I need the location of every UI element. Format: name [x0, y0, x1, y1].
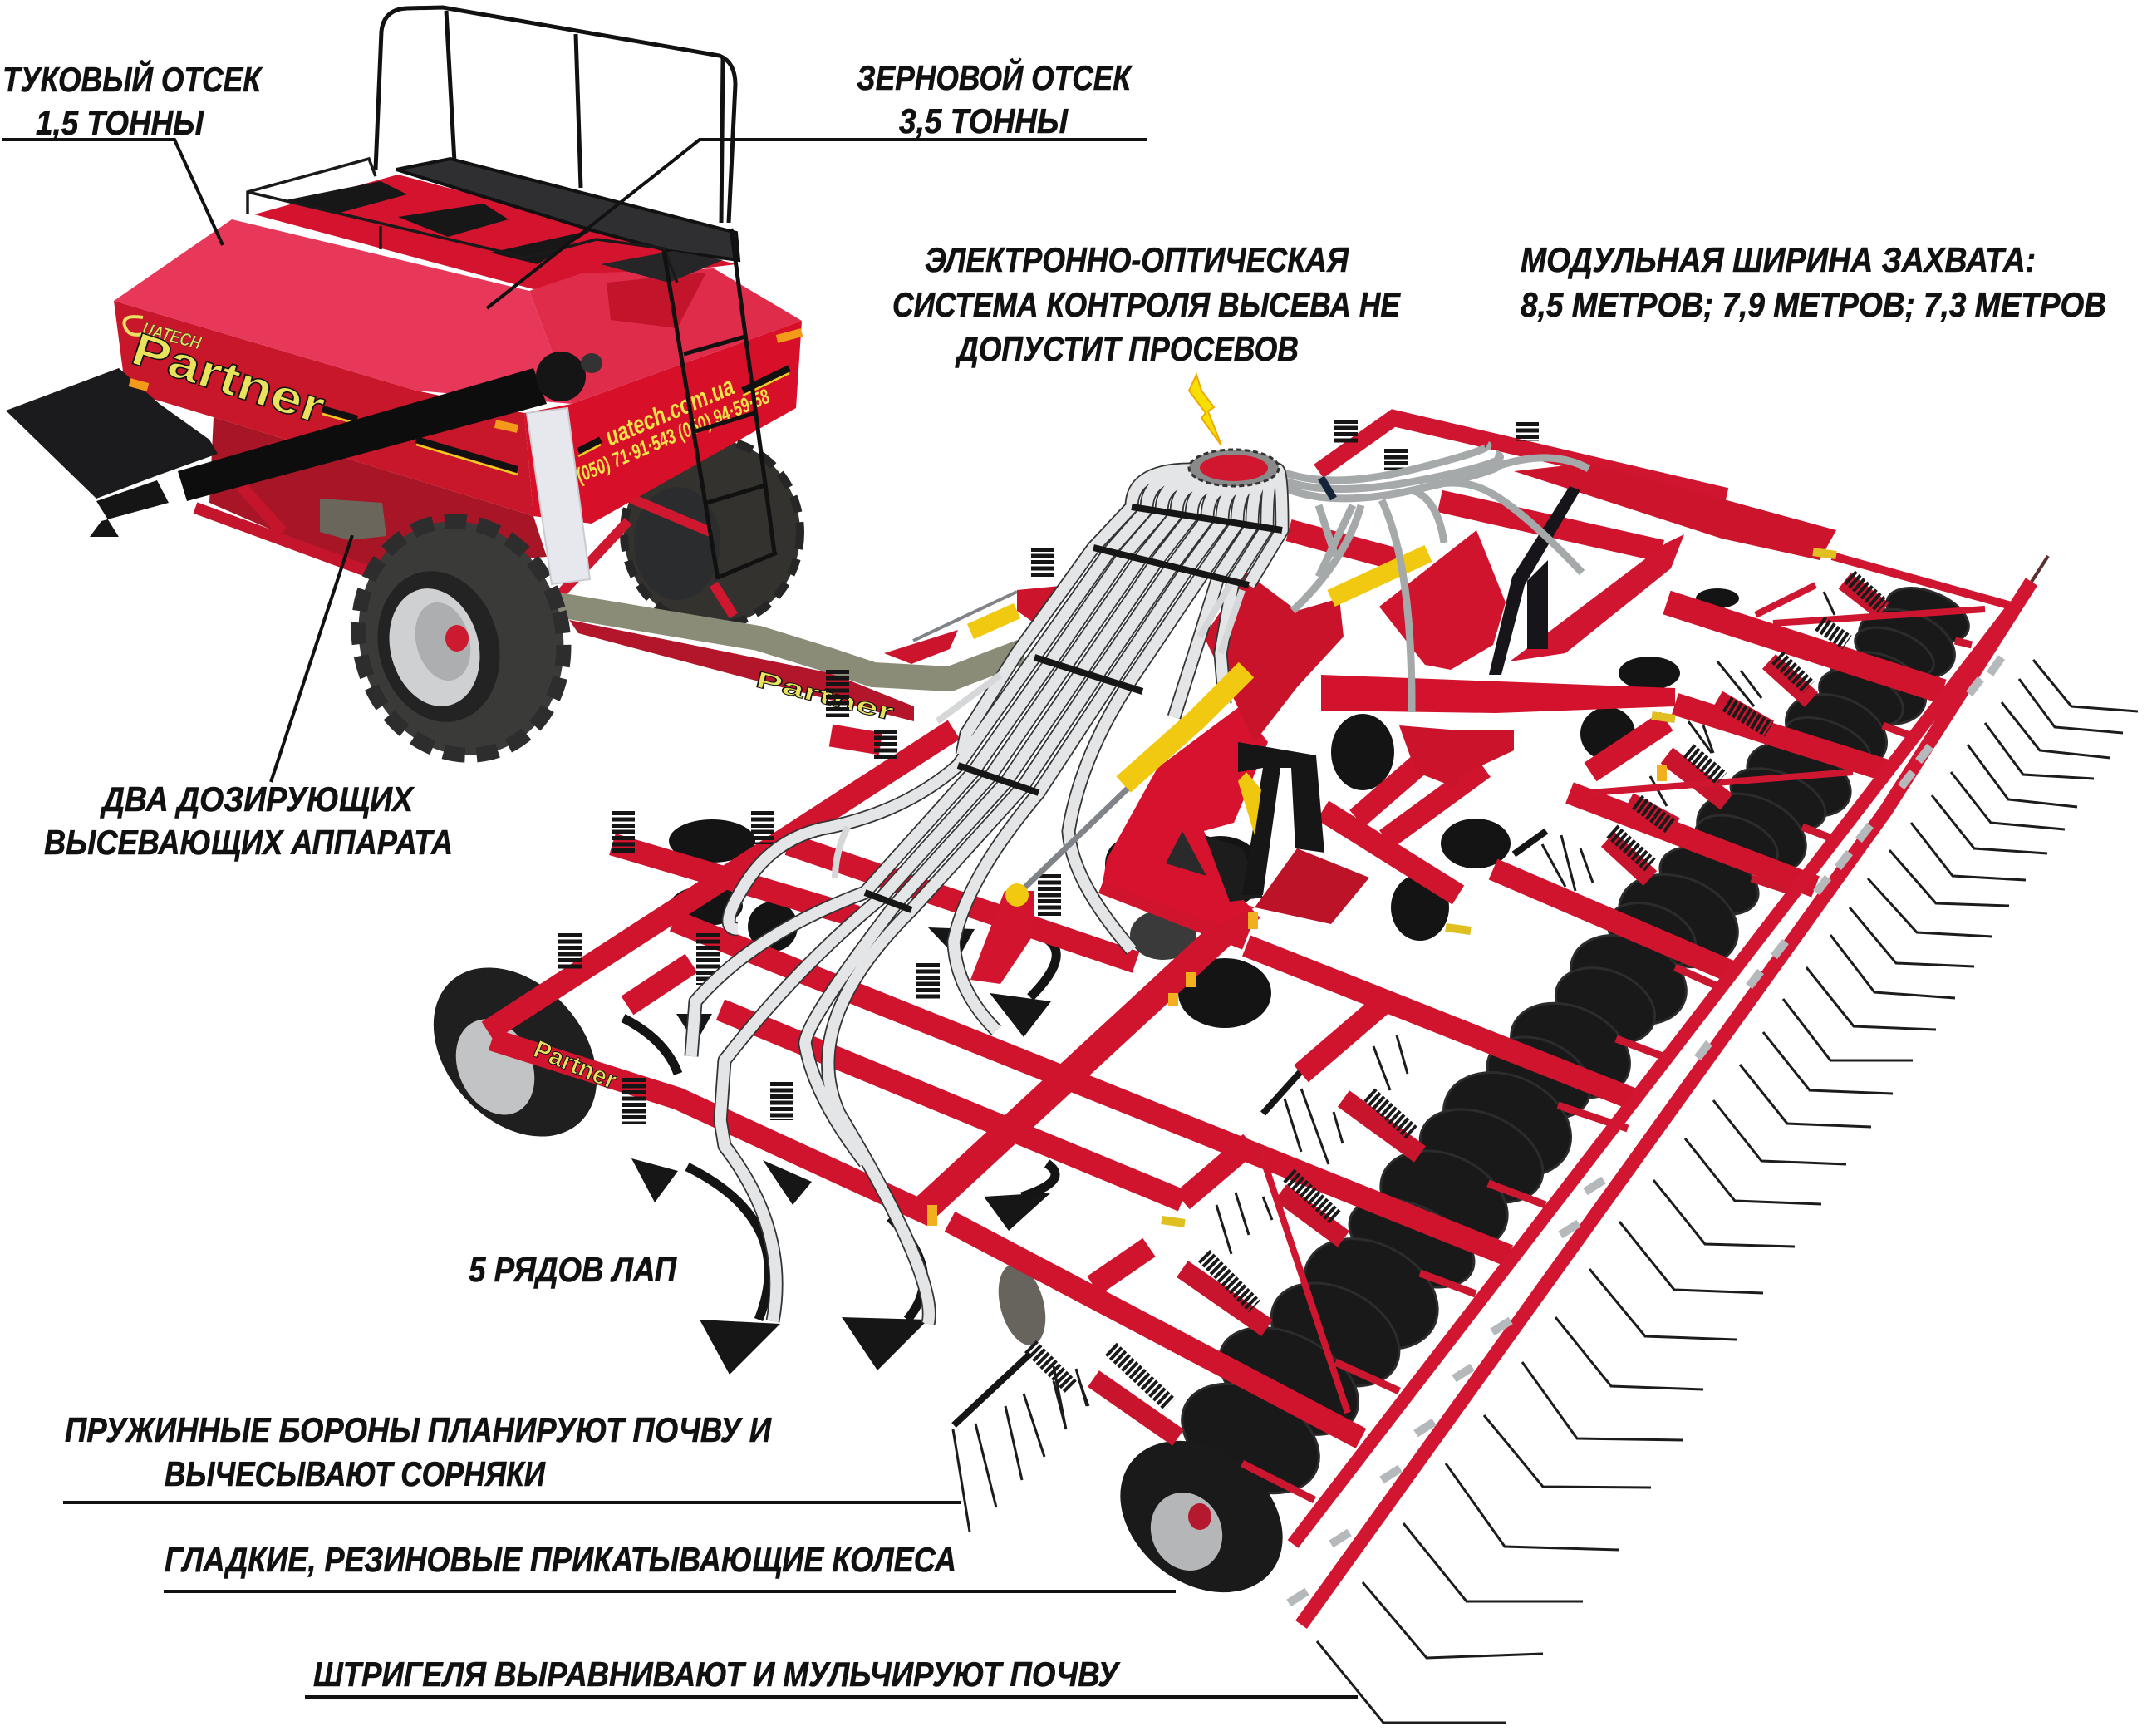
black strut lower [1527, 560, 1548, 649]
shovels [631, 927, 1051, 1375]
hopper lid deck [254, 175, 736, 289]
upper hydraulic cylinder [1331, 553, 1428, 598]
tyre lugs [332, 498, 590, 779]
tyre [400, 936, 630, 1168]
rim [1138, 1481, 1235, 1582]
main cylinder rod [1017, 789, 1128, 895]
distributor hub [1189, 450, 1279, 486]
lightning icon [1189, 375, 1221, 445]
label: spring harrows: ВЫЧЕСЫВАЮТ СОРНЯКИ [165, 1454, 546, 1493]
frame logo: Partner [529, 1035, 621, 1095]
lid guard rail [248, 159, 677, 283]
drawbar logo: Partner [754, 666, 897, 725]
dark gearbox [1205, 835, 1263, 902]
logo [124, 317, 332, 434]
grey side hoses [1280, 445, 1589, 712]
mast right panel [1379, 530, 1506, 670]
auger lower end [90, 480, 169, 537]
label: modular width: МОДУЛЬНАЯ ШИРИНА ЗАХВАТА: [1521, 240, 2036, 279]
amber reflectors [932, 765, 1662, 1226]
rack springs [1030, 577, 1883, 1404]
hub disc [1200, 455, 1268, 481]
rear wheel [624, 440, 800, 626]
label: fertilizer compartment: 1,5 ТОННЫ [36, 103, 204, 142]
hose outlines [691, 470, 1282, 1324]
second beam row [1667, 602, 1943, 691]
harrow rods [954, 831, 1546, 1425]
air cart (seed hopper) [6, 7, 1022, 779]
harrow clips [1289, 657, 2002, 1603]
label: grain compartment: 3,5 ТОННЫ [899, 101, 1069, 140]
sidewall [361, 557, 516, 736]
Partner label: Partner [125, 322, 332, 434]
auger motor [536, 352, 586, 401]
amber reflectors [130, 332, 802, 429]
press wheels [1163, 578, 1977, 1516]
rim [376, 578, 493, 716]
label: fertilizer compartment: ТУКОВЫЙ ОТСЕК [2, 58, 263, 99]
tarp hopper [6, 368, 218, 499]
rim ring [407, 596, 479, 687]
horizontal beam [1321, 675, 1675, 713]
wheel arms [1242, 641, 1972, 1500]
label: electro-optical control: ДОПУСТИТ ПРОСЕВОВ [955, 329, 1299, 368]
yellow blade [1238, 772, 1261, 835]
central hub disc [1130, 910, 1196, 960]
rim [441, 1006, 549, 1128]
thin top bar [1832, 556, 2014, 607]
roller frame bar [1293, 607, 2014, 1544]
hose clamp on right [1321, 478, 1334, 499]
transport wheel [1090, 1409, 1313, 1624]
hatch lids [281, 181, 592, 264]
phone: (050) 71·91·543 (050) 94·59·58 [572, 385, 774, 488]
hose fill [691, 470, 1282, 1324]
website: uatech.com.ua [601, 371, 739, 451]
label: grain compartment: ЗЕРНОВОЙ ОТСЕК [857, 57, 1133, 97]
metering unit [320, 499, 386, 540]
comb racks [570, 420, 1527, 1124]
ladder [664, 229, 777, 579]
label: electro-optical control: ЭЛЕКТРОННО-ОПТИЧЕСКАЯ [925, 240, 1349, 279]
left gauge wheel [400, 936, 630, 1168]
label: press wheels: ГЛАДКИЕ, РЕЗИНОВЫЕ ПРИКАТЫВАЮЩИЕ КОЛЕСА [165, 1540, 956, 1579]
rod eye [1005, 883, 1029, 907]
tyre [1090, 1409, 1313, 1624]
auger [90, 352, 602, 537]
main seed hose bundle [691, 470, 1282, 1324]
UATECH label: UATECH [140, 318, 204, 354]
mesh panel [607, 273, 706, 328]
mast upper [1204, 573, 1344, 742]
chassis bar [195, 486, 366, 571]
front wheel [332, 498, 590, 779]
opener discs [669, 588, 1739, 1028]
black bracket [1238, 742, 1324, 895]
mesh platform [396, 159, 739, 260]
hopper right side face [524, 321, 802, 524]
cart chassis [209, 417, 547, 571]
motor cap [581, 353, 602, 373]
hub [445, 625, 469, 652]
drawbar [569, 620, 914, 721]
decal stripe highlights [322, 373, 789, 475]
hub [1188, 1503, 1211, 1530]
label: metering units: ВЫСЕВАЮЩИХ АППАРАТА [44, 823, 453, 862]
hopper slanted right panel [529, 268, 802, 404]
label: electro-optical control: СИСТЕМА КОНТРОЛЯ ВЫСЕВА НЕ [892, 285, 1402, 324]
label: spring harrows: ПРУЖИННЫЕ БОРОНЫ ПЛАНИРУЮТ ПОЧВУ И [65, 1410, 772, 1449]
left hydraulic cylinder [970, 611, 1017, 632]
main hydraulic cylinder [1123, 670, 1246, 784]
spring arms [1093, 581, 1883, 1438]
cylinder bracket [884, 630, 958, 664]
spring harrow tines [953, 592, 1835, 1532]
braces [1259, 585, 1985, 1413]
cylinder mount [1017, 585, 1069, 623]
hopper left side face [114, 301, 533, 516]
mast hole [1166, 831, 1206, 876]
hopper slanted top panel [114, 219, 572, 404]
coulter [990, 1259, 1054, 1350]
label: straw harrows: ШТРИГЕЛЯ ВЫРАВНИВАЮТ И МУЛЬЧИРУЮТ ПОЧВУ [313, 1655, 1121, 1694]
rear harrow bar lower [1301, 582, 2032, 1625]
harrow bar tip [2032, 556, 2048, 582]
safety rail [376, 7, 735, 223]
decal stripes [322, 368, 789, 470]
seeder cultivator [400, 418, 2138, 1723]
website and phone [572, 371, 774, 488]
white flexible hose [527, 408, 590, 584]
shanks [623, 939, 1056, 1320]
rear axle strut [553, 499, 734, 616]
main frame beams [488, 501, 1891, 1438]
rear straw harrow tines [1317, 660, 2138, 1723]
label: metering units: ДВА ДОЗИРУЮЩИХ [100, 779, 415, 819]
platform step [601, 251, 723, 283]
swirl mark [124, 317, 143, 335]
upper frame [1319, 418, 1727, 496]
main cross beam [924, 907, 1250, 1209]
beam mount [1399, 725, 1514, 789]
black gas strut [1489, 486, 1580, 675]
mast base [1255, 848, 1369, 924]
auger tube [178, 368, 547, 501]
hose clamps [865, 507, 1282, 910]
transfer hose [558, 605, 1022, 679]
front pivot bracket [970, 891, 1034, 984]
callout leader lines [2, 140, 1358, 1697]
extra side seed hoses [835, 585, 1242, 878]
label: five rows of tines: 5 РЯДОВ ЛАП [469, 1250, 677, 1289]
upper frame thick [1514, 463, 1836, 560]
strut bracket [1510, 534, 1684, 661]
hub ring [1189, 450, 1279, 486]
mast lower [1103, 706, 1268, 925]
left cylinder rod [913, 592, 1017, 641]
valve connectors [1162, 552, 1836, 1223]
